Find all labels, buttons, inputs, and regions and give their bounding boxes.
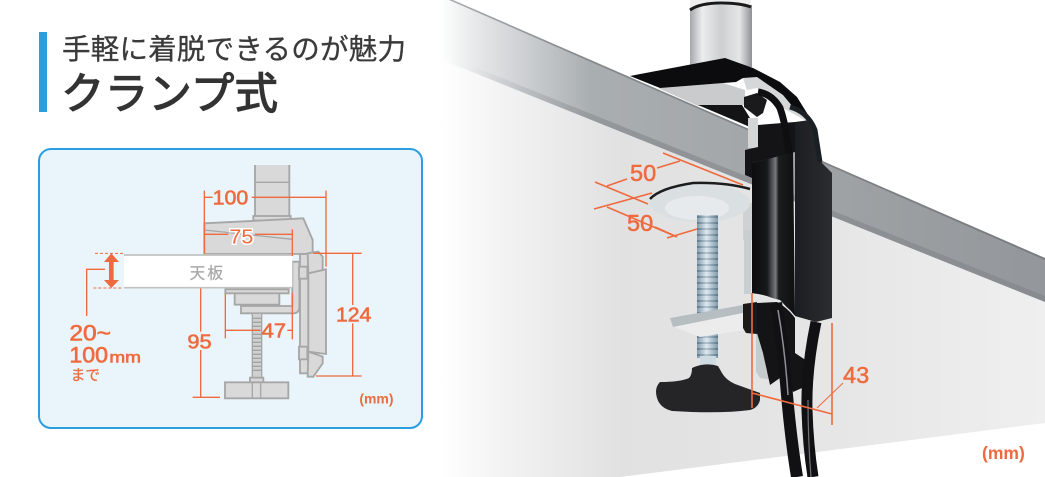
- clamp drawing: [204, 165, 326, 398]
- bolt and disc: [650, 183, 753, 367]
- tabletop: 天板: [190, 265, 225, 283]
- dimension 47: 47: [262, 319, 286, 342]
- knob: [656, 364, 760, 412]
- unit label: (mm): [359, 390, 394, 406]
- thickness range label: [69, 321, 141, 384]
- clip tab: [745, 122, 795, 178]
- thickness range label: まで: [71, 368, 100, 384]
- label: 50 lower: 50: [627, 210, 653, 236]
- dimension 124: [313, 253, 371, 376]
- thickness range label: 100: [69, 342, 108, 367]
- desk edge bar: [437, 0, 1045, 302]
- clamp top bracket: [630, 58, 810, 127]
- lower strap: [757, 302, 810, 392]
- label: 43: 43: [843, 362, 869, 388]
- washer plate: [670, 305, 743, 337]
- dimension 100: 100: [213, 186, 248, 209]
- dimension 75: [204, 225, 292, 256]
- label: photo unit: (mm): [982, 443, 1025, 463]
- desk underside surface: [437, 58, 1045, 477]
- black cable housing: [743, 92, 832, 392]
- upper cable loop: [758, 92, 789, 153]
- dimension 95: 95: [187, 330, 212, 353]
- diagram: [69, 165, 394, 406]
- heading line two: クランプ式: [61, 71, 278, 119]
- photo dimension lines: [594, 153, 843, 425]
- dimension 124: 124: [336, 304, 371, 327]
- lower silver bracket: [744, 118, 772, 380]
- front strap: [752, 152, 795, 316]
- cables: [776, 303, 816, 477]
- tabletop: [124, 255, 292, 288]
- dimension 47: [225, 293, 292, 342]
- heading accent bar: [39, 32, 47, 112]
- dimension 75: 75: [229, 225, 253, 248]
- photo backdrop: desk and clamp: [430, 0, 1045, 477]
- clip block: [744, 93, 767, 117]
- thickness range arrow: [87, 253, 123, 316]
- panel: side view diagram: [39, 149, 422, 428]
- silver pole: [690, 0, 752, 67]
- heading line one: 手軽に着脱できるのが魅力: [62, 34, 406, 66]
- dimension 100: [204, 186, 326, 267]
- thickness range label: 20~: [69, 321, 111, 346]
- right housing: [795, 120, 832, 322]
- dimension 95: [187, 288, 220, 397]
- label: 50 upper: 50: [630, 160, 656, 186]
- thickness range label: mm: [109, 349, 141, 366]
